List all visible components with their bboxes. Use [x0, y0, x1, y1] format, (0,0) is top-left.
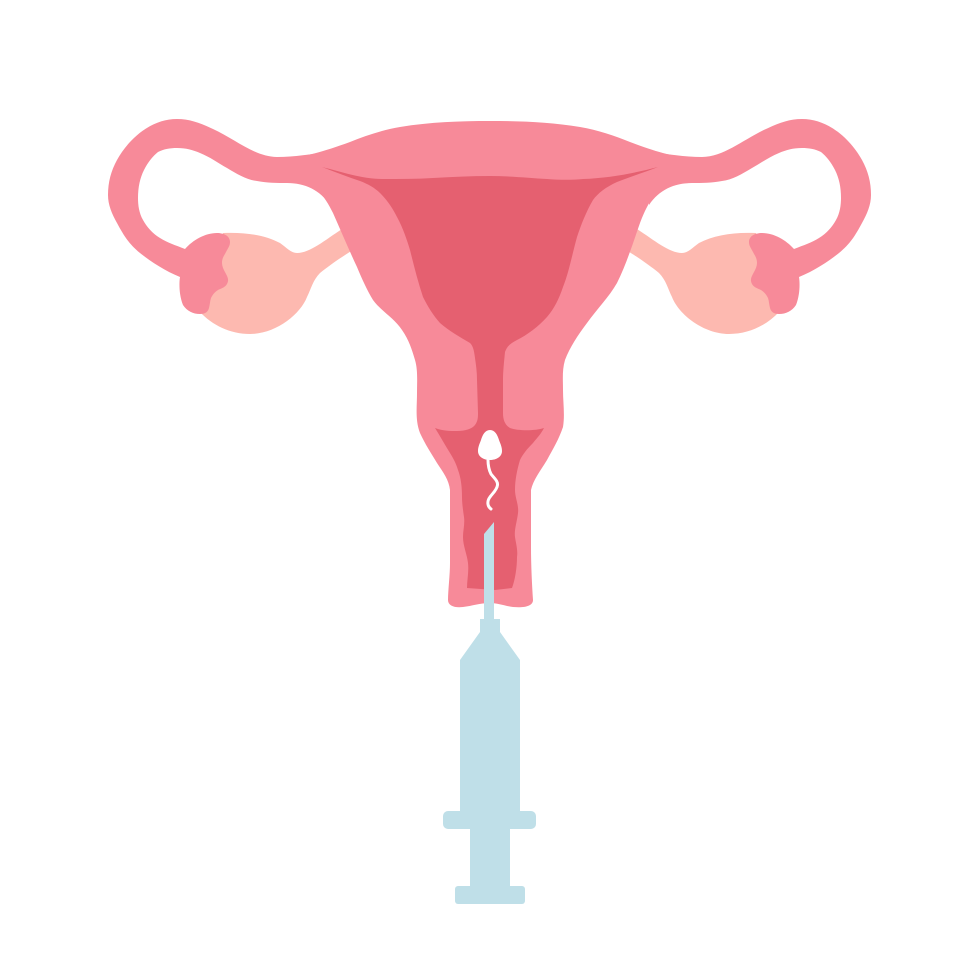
right ovary and ligament [623, 229, 779, 334]
left ovary and ligament [200, 229, 356, 334]
sperm [478, 430, 502, 509]
left fallopian tube with fimbriae [108, 119, 330, 314]
uterine cavity and cervical canal [322, 167, 658, 590]
uterus body and cervix [290, 121, 689, 607]
sperm head [478, 430, 502, 460]
right fallopian tube with fimbriae [649, 119, 871, 314]
plunger rod [470, 827, 510, 888]
plunger thumb rest [455, 886, 525, 904]
finger flange [443, 811, 536, 829]
sperm tail [488, 460, 498, 509]
syringe barrel [460, 619, 520, 813]
syringe [443, 522, 536, 904]
catheter needle [484, 522, 494, 622]
